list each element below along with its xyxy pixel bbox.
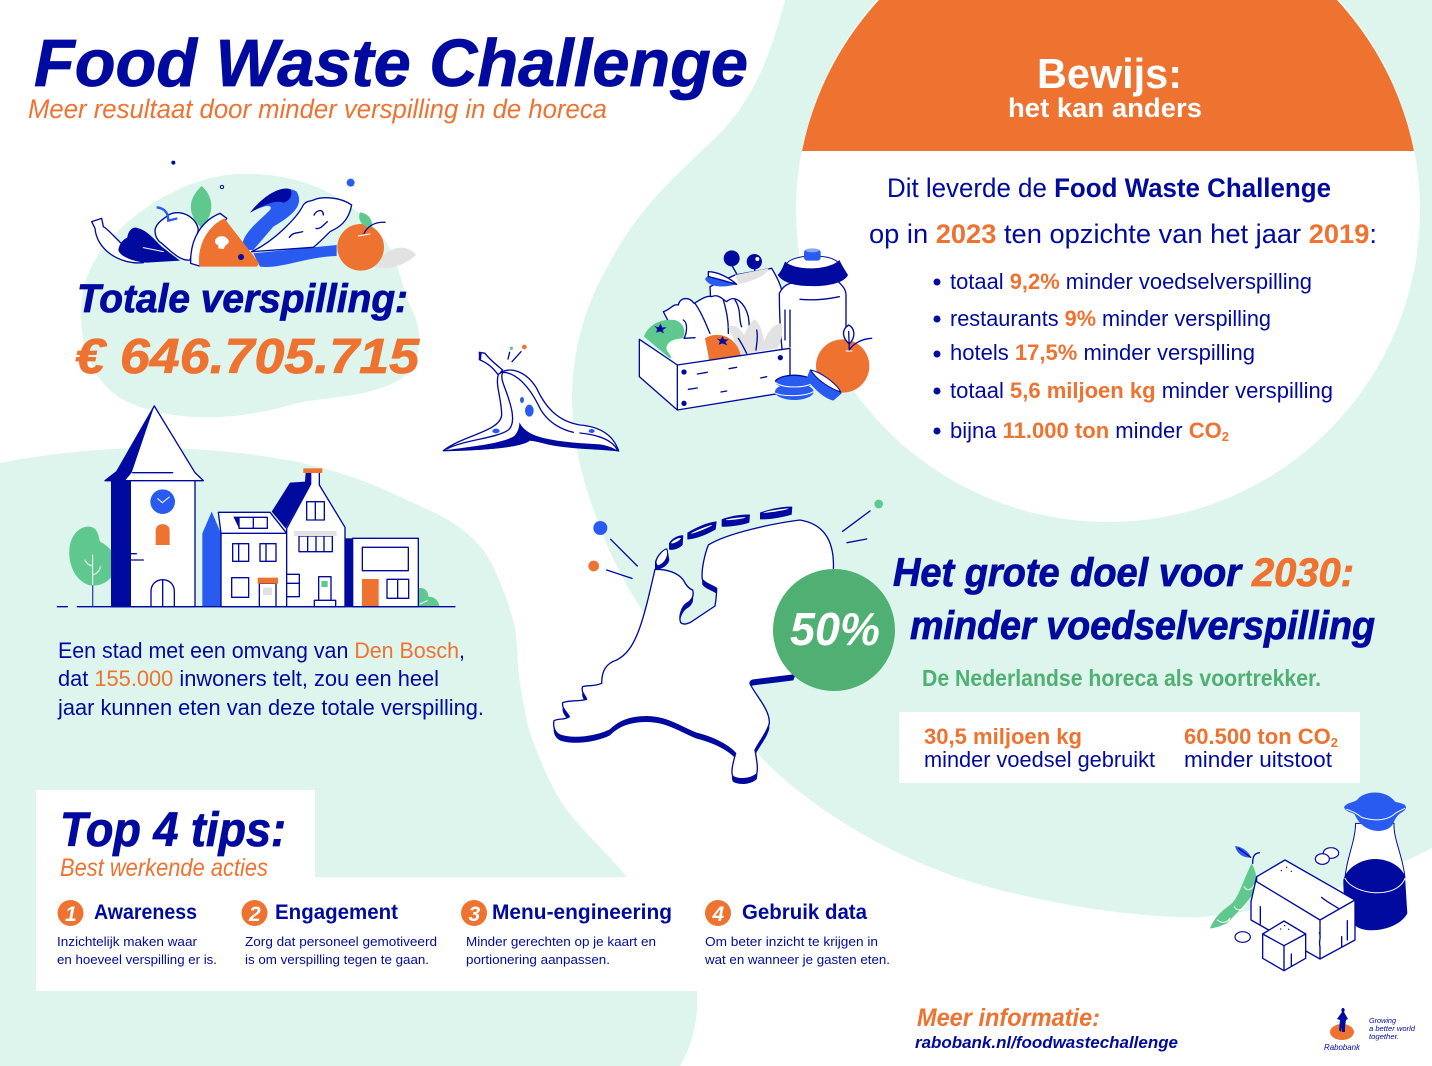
heading: goal 2030: 2030: — [1251, 551, 1354, 595]
tip 3 — [461, 900, 672, 967]
logo: Rabobank: Rabobank — [1324, 1042, 1361, 1052]
bullet list: restaurants 9% minder verspilling — [950, 306, 1271, 331]
background: mint shape bottom left — [0, 448, 697, 1066]
map outline — [554, 520, 833, 779]
proof heading: Bewijs: — [1037, 50, 1182, 97]
heading: goal 2030 — [893, 551, 1375, 648]
panel: goal figures: minder voedsel gebruikt — [924, 747, 1155, 772]
bullet list: totaal 5,6 miljoen kg minder verspilling — [950, 378, 1333, 403]
badge: 50%: 50% — [790, 603, 880, 655]
heading: total waste: Totale verspilling: — [77, 277, 408, 321]
heading: goal 2030: minder voedselverspilling — [910, 604, 1375, 648]
icon: town — [57, 406, 455, 607]
tips heading: Top 4 tips: — [60, 804, 286, 857]
tip 4: 4 — [712, 903, 724, 926]
bullet list: hotels 17,5% minder verspilling — [950, 340, 1255, 365]
orange cap — [802, 0, 1414, 151]
tips subheading: Best werkende acties — [60, 854, 268, 882]
panel: goal figures — [899, 712, 1360, 783]
icon: tofu, soy pod and jug — [1210, 792, 1407, 971]
logo: Rabobank — [1324, 1008, 1416, 1052]
tip 4: wat en wanneer je gasten eten. — [704, 952, 890, 967]
description: city comparison: Een stad met een omvang van Den Bosch, — [58, 638, 465, 663]
tip 1: 1 — [65, 903, 77, 926]
bullet list: 2 — [1222, 429, 1229, 444]
description: city comparison: jaar kunnen eten van deze totale verspilling. — [57, 695, 484, 720]
panel: goal figures: 2 — [1331, 735, 1338, 750]
wadden islands — [655, 507, 792, 569]
tip 3: Minder gerechten op je kaart en — [466, 934, 656, 949]
panel: goal figures: 60.500 ton CO — [1184, 724, 1331, 749]
proof intro line 1: Dit leverde de Food Waste Challenge — [887, 173, 1331, 203]
tip 1: Inzichtelijk maken waar — [57, 934, 198, 949]
tip 1: en hoeveel verspilling er is. — [57, 952, 217, 967]
more information heading: Meer informatie: — [917, 1004, 1100, 1032]
more information link: rabobank.nl/foodwastechallenge — [915, 1033, 1178, 1052]
description: city comparison — [57, 638, 484, 720]
goal subtitle: De Nederlandse horeca als voortrekker. — [922, 665, 1321, 691]
heading: goal 2030: Het grote doel voor — [893, 551, 1243, 595]
panel: goal figures: 30,5 miljoen kg — [924, 724, 1082, 749]
tip 3: portionering aanpassen. — [466, 952, 610, 967]
tip 2: 2 — [248, 903, 261, 926]
tip 4: Om beter inzicht te krijgen in — [705, 934, 878, 949]
logo: Rabobank: a better world — [1369, 1026, 1416, 1033]
icon: vegetables — [92, 161, 416, 271]
logo: Rabobank: together. — [1369, 1034, 1399, 1041]
background: mint blob behind total — [81, 174, 419, 417]
tip 2: Zorg dat personeel gemotiveerd — [245, 934, 437, 949]
tip 2: is om verspilling tegen te gaan. — [245, 952, 429, 967]
tip 2: Engagement — [275, 901, 398, 924]
title: Food Waste Challenge — [34, 26, 748, 101]
tip 4 — [704, 900, 890, 967]
proof subheading: het kan anders — [1008, 93, 1202, 123]
bullet list: bijna 11.000 ton minder CO — [950, 418, 1222, 443]
panel: proof circle — [796, 0, 1420, 522]
tip 1: Awareness — [94, 901, 197, 924]
bullet list: totaal 9,2% minder voedselverspilling — [950, 269, 1312, 294]
panel: goal figures: minder uitstoot — [1184, 747, 1332, 772]
map shadow — [554, 525, 833, 784]
panel: top 4 tips — [36, 790, 900, 991]
map: Netherlands — [554, 500, 883, 784]
proof intro line 2: op in 2023 ten opzichte van het jaar 2019: — [869, 219, 1377, 249]
subtitle: Meer resultaat door minder verspilling in de horeca — [28, 94, 607, 124]
tip 4: Gebruik data — [742, 901, 867, 924]
tip 3: 3 — [468, 903, 480, 926]
sparkle rays and dots — [588, 500, 883, 578]
logo: Rabobank: Growing — [1369, 1018, 1396, 1025]
tip 2 — [242, 900, 437, 967]
bullet list — [934, 269, 1333, 444]
total amount: € 646.705.715 — [75, 330, 420, 384]
tip 3: Menu-engineering — [492, 901, 672, 924]
tip 1 — [57, 900, 217, 967]
icon: crate with food — [639, 248, 872, 410]
badge: 50% — [773, 569, 895, 691]
description: city comparison: dat 155.000 inwoners telt, zou een heel — [58, 666, 439, 691]
icon: banana peel — [443, 345, 619, 451]
background: mint shape right — [572, 0, 1432, 917]
